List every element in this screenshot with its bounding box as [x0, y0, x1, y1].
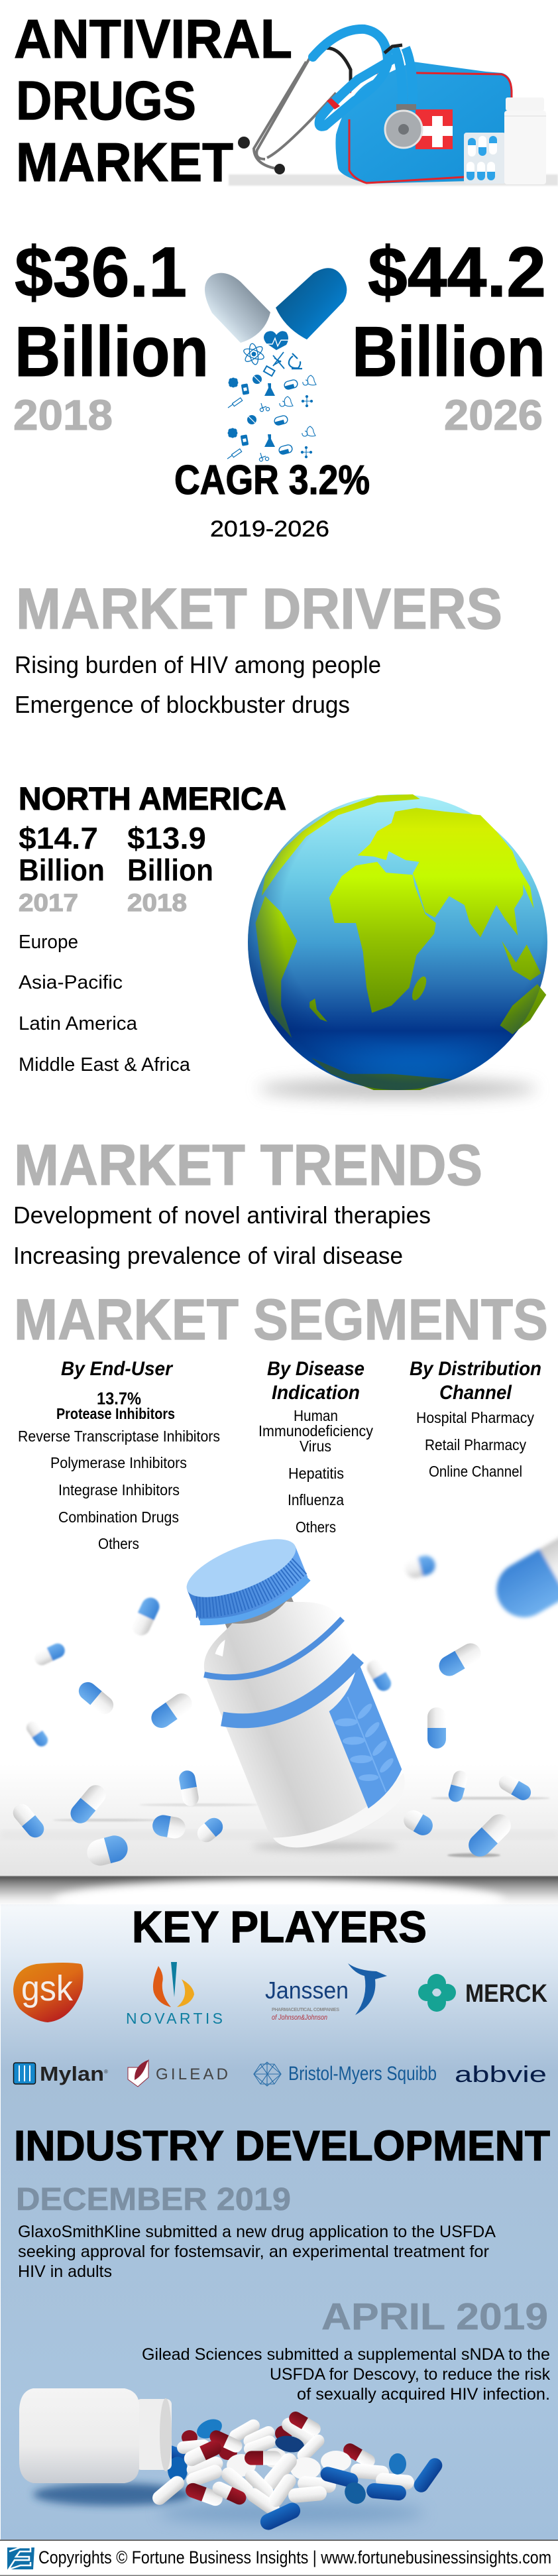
title: MARKET	[16, 131, 233, 193]
segment column: by end-user: 13.7%	[97, 1388, 141, 1408]
logo: merck: MERCK	[465, 1980, 547, 2008]
logo: merck	[418, 1974, 547, 2012]
segment column: by distribution channel: Retail Pharmacy	[425, 1436, 526, 1453]
heading: market drivers: MARKET DRIVERS	[16, 577, 502, 641]
segment column: by end-user: By End-User	[61, 1358, 174, 1380]
logo: janssen: Janssen	[265, 1977, 349, 2004]
logo: novartis	[126, 1962, 223, 2027]
development: december 2019: seeking approval for fostemsavir, an experimental treatment for	[18, 2242, 489, 2261]
market trends list: Development of novel antiviral therapies	[13, 1201, 431, 1229]
market trends list: Increasing prevalence of viral disease	[13, 1242, 403, 1269]
stat: 2018 market value: $36.1	[15, 232, 187, 312]
segment column: by disease indication	[258, 1358, 373, 1536]
development: april 2019: of sexually acquired HIV infection.	[297, 2385, 550, 2404]
segment column: by disease indication: Influenza	[288, 1491, 344, 1508]
development: december 2019	[16, 2182, 496, 2281]
regions list: Europe	[19, 932, 78, 953]
regional block: north america: 2018	[127, 889, 187, 916]
logo: mylan: Mylan	[40, 2062, 104, 2085]
illustration: medical bag and stethoscope	[229, 29, 558, 186]
segment column: by distribution channel: By Distribution	[410, 1358, 541, 1380]
logo: janssen: PHARMACEUTICAL COMPANIES	[272, 2008, 339, 2012]
logo: mylan	[13, 2062, 108, 2085]
segment column: by distribution channel: Hospital Pharmacy	[416, 1409, 534, 1426]
regional block: north america: $14.7	[19, 821, 98, 855]
logo: gilead	[128, 2060, 228, 2087]
title: DRUGS	[16, 70, 196, 131]
logo: bristol-myers squibb	[254, 2062, 437, 2086]
illustration: spilled pills	[33, 2409, 445, 2533]
CAGR callout	[174, 458, 370, 542]
logo: bristol-myers squibb: Bristol-Myers Squibb	[288, 2063, 437, 2085]
segment column: by end-user: Combination Drugs	[58, 1508, 179, 1526]
segment column: by end-user: Protease Inhibitors	[56, 1405, 175, 1422]
logo: janssen	[265, 1963, 387, 2022]
regional block: north america: 2017	[19, 889, 78, 916]
market drivers list: Emergence of blockbuster drugs	[15, 691, 350, 718]
regions list: Middle East & Africa	[19, 1054, 191, 1075]
regions list	[19, 932, 191, 1075]
footer bar	[0, 2540, 558, 2576]
stat: 2026 market value	[352, 232, 546, 439]
segment column: by distribution channel	[410, 1358, 541, 1480]
regional block: north america	[19, 782, 286, 916]
logo: gsk: gsk	[21, 1969, 74, 2008]
stat: 2018 market value: 2018	[13, 391, 113, 439]
development: april 2019: Gilead Sciences submitted a supplemental sNDA to the	[142, 2345, 550, 2364]
stat: 2018 market value	[13, 232, 209, 439]
logo: mylan: ®	[104, 2069, 108, 2075]
segment column: by end-user: Integrase Inhibitors	[58, 1481, 180, 1499]
segment column: by end-user: Reverse Transcriptase Inhibitors	[18, 1428, 220, 1445]
heading: key players: KEY PLAYERS	[132, 1902, 427, 1952]
segment column: by distribution channel: Online Channel	[429, 1463, 522, 1480]
development: april 2019	[142, 2296, 550, 2404]
development: december 2019: DECEMBER 2019	[16, 2182, 291, 2217]
regional block: north america: $13.9	[127, 821, 206, 855]
icon: open capsule	[205, 268, 347, 343]
regions list: Asia-Pacific	[19, 972, 123, 993]
regions list: Latin America	[19, 1013, 138, 1034]
development: april 2019: APRIL 2019	[321, 2296, 548, 2338]
stat: 2026 market value: 2026	[444, 391, 543, 439]
segment column: by end-user: Polymerase Inhibitors	[50, 1454, 187, 1471]
scattered capsules	[9, 1518, 558, 1869]
segment column: by end-user	[18, 1358, 220, 1552]
logo: novartis: NOVARTIS	[126, 2010, 223, 2027]
development: december 2019: GlaxoSmithKline submitted a new drug application to the USFDA	[18, 2223, 496, 2241]
illustration: white pill bottle	[19, 2388, 172, 2483]
development: december 2019: HIV in adults	[18, 2262, 112, 2281]
segment column: by disease indication: Human	[294, 1407, 338, 1424]
title	[14, 8, 292, 193]
icons: medical symbols falling from capsule	[227, 331, 316, 461]
segment column: by distribution channel: Channel	[439, 1382, 512, 1404]
segment column: by disease indication: Virus	[300, 1438, 331, 1455]
logo: janssen: of Johnson&Johnson	[272, 2014, 327, 2022]
illustration: tilted pill bottle	[165, 1521, 418, 1863]
market drivers list	[15, 651, 381, 718]
regional block: north america: NORTH AMERICA	[19, 782, 286, 817]
segment column: by disease indication: Immunodeficiency	[258, 1422, 373, 1440]
development: april 2019: USFDA for Descovy, to reduce the risk	[270, 2365, 550, 2384]
CAGR callout: CAGR 3.2%	[174, 458, 370, 503]
shadow band under bottle panel	[0, 1876, 558, 1921]
icon: fortune business insights logo	[7, 2547, 34, 2569]
market trends list	[13, 1201, 431, 1269]
segment column: by disease indication: Indication	[272, 1382, 360, 1404]
segment column: by disease indication: Hepatitis	[288, 1465, 344, 1482]
CAGR callout: 2019-2026	[210, 517, 329, 542]
stat: 2026 market value: $44.2	[368, 232, 546, 312]
market drivers list: Rising burden of HIV among people	[15, 651, 381, 678]
stat: 2018 market value: Billion	[15, 312, 209, 391]
logo: abbvie: abbvie	[455, 2062, 547, 2087]
floor behind bottle	[0, 1764, 558, 1876]
heading: market trends: MARKET TRENDS	[14, 1133, 482, 1197]
illustration: globe	[248, 794, 547, 1098]
blue lower panel	[1, 1904, 558, 2540]
segment column: by end-user: Others	[98, 1535, 139, 1552]
title: ANTIVIRAL	[14, 8, 292, 70]
heading: industry development: INDUSTRY DEVELOPMENT	[14, 2122, 550, 2170]
regional block: north america: Billion	[127, 853, 213, 887]
segment column: by disease indication: By Disease	[267, 1358, 364, 1380]
segment column: by disease indication: Others	[296, 1518, 336, 1536]
regional block: north america: Billion	[19, 853, 105, 887]
logo: gsk	[13, 1963, 84, 2022]
logo: gilead: GILEAD	[156, 2065, 228, 2083]
